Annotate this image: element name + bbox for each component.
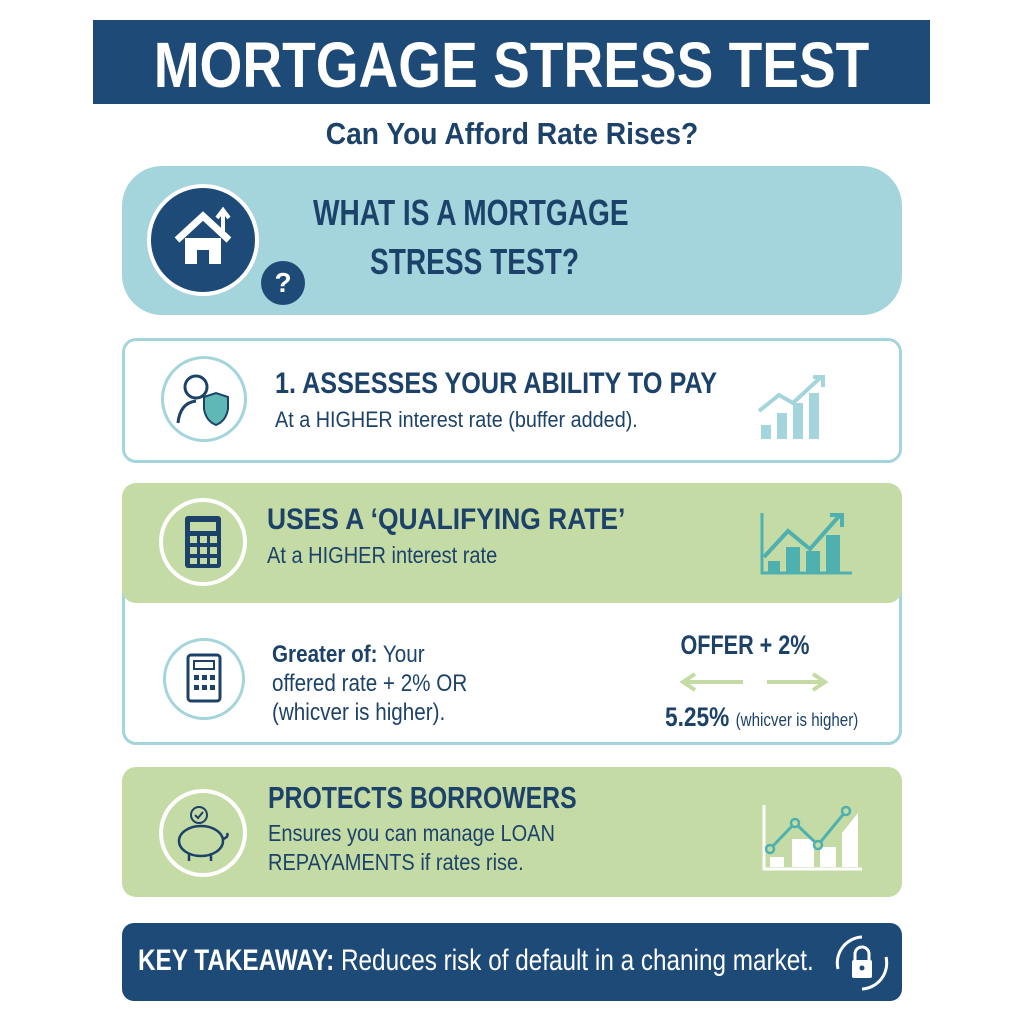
icon: chart bbox=[758, 375, 825, 439]
icon: calculator bbox=[163, 638, 245, 720]
icon: line chart bbox=[762, 805, 862, 870]
icon: question bbox=[261, 261, 305, 305]
text: offered rate + 2% OR bbox=[272, 670, 467, 697]
subtitle: Can You Afford Rate Rises? bbox=[326, 116, 698, 151]
panel: qualifying rate bbox=[122, 575, 902, 745]
text: At a HIGHER interest rate bbox=[267, 542, 497, 568]
heading: USES A ‘QUALIFYING RATE’ bbox=[267, 503, 625, 536]
icon: question: ? bbox=[274, 267, 292, 298]
callout: rate: 5.25% (whicver is higher) bbox=[665, 702, 858, 732]
panel: what is bbox=[122, 166, 902, 315]
text: Ensures you can manage LOAN bbox=[268, 820, 555, 846]
panel: protects bbox=[122, 767, 902, 897]
text: (whicver is higher). bbox=[272, 699, 445, 726]
text bbox=[272, 641, 467, 726]
icon: lock bbox=[836, 936, 888, 990]
panel: what is: STRESS TEST? bbox=[370, 241, 579, 282]
arrows bbox=[680, 672, 828, 692]
icon: chart bbox=[760, 513, 852, 574]
heading: 1. ASSESSES YOUR ABILITY TO PAY bbox=[275, 367, 717, 400]
icon: person shield bbox=[161, 356, 247, 442]
text: KEY TAKEAWAY: Reduces risk of default in a chaning market. bbox=[138, 944, 814, 977]
heading: PROTECTS BORROWERS bbox=[268, 780, 577, 815]
icon: piggy bank bbox=[159, 789, 247, 877]
icon: calculator circle bbox=[159, 498, 247, 586]
text: Greater of: Your bbox=[272, 641, 425, 668]
callout: offer: OFFER + 2% bbox=[680, 630, 810, 660]
panel: assesses bbox=[122, 338, 902, 463]
text: At a HIGHER interest rate (buffer added). bbox=[275, 407, 638, 432]
panel: key takeaway bbox=[122, 923, 902, 1001]
heading: WHAT IS A MORTGAGE bbox=[313, 192, 629, 233]
title: MORTGAGE STRESS TEST bbox=[154, 29, 869, 101]
text bbox=[268, 820, 555, 875]
title bar bbox=[93, 20, 930, 104]
text: REPAYAMENTS if rates rise. bbox=[268, 849, 524, 875]
icon: house bbox=[147, 184, 259, 296]
